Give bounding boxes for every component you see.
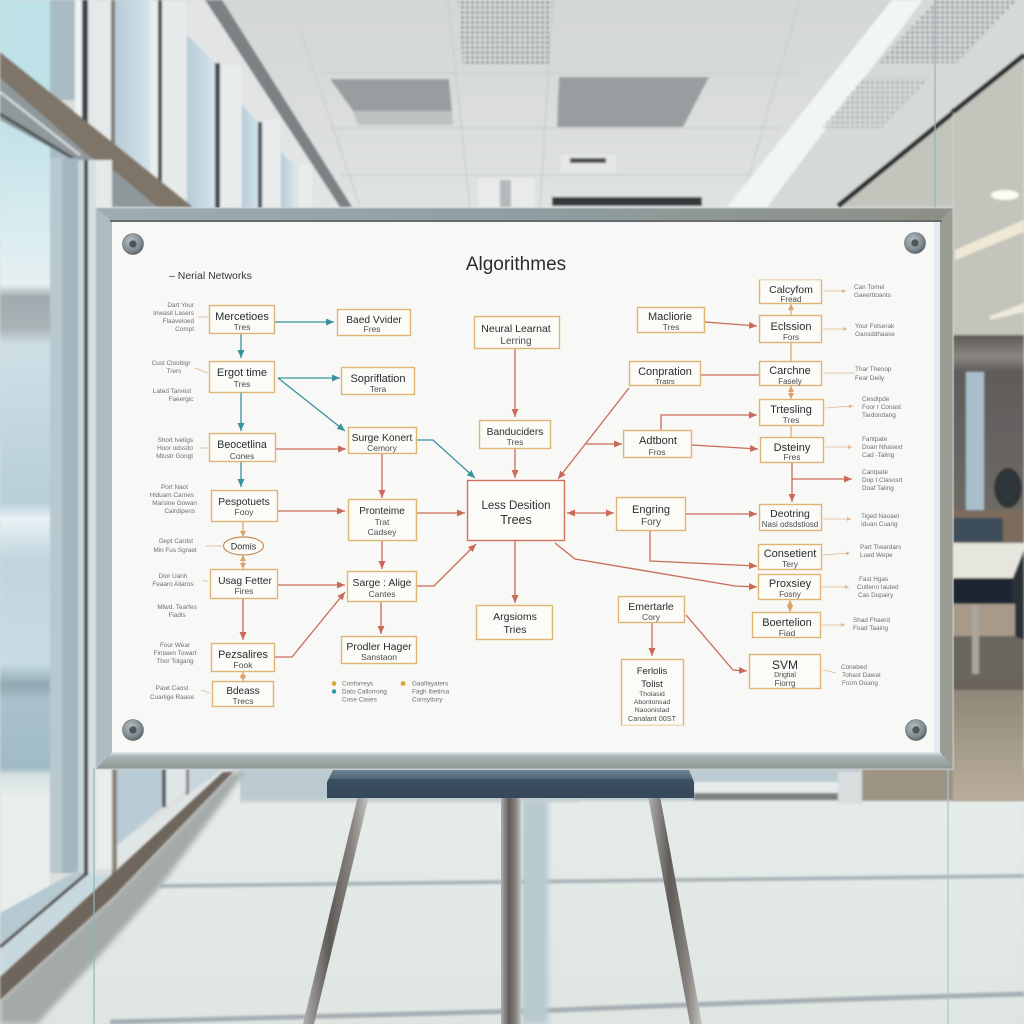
node: Sarge Alige: Sarge : Alige bbox=[353, 578, 412, 589]
node: Engring: Fory bbox=[641, 517, 661, 528]
node: Conpration: Conpration bbox=[638, 366, 692, 378]
note: Pezsalires: Four Wear bbox=[160, 642, 191, 649]
node: Consetient bbox=[758, 544, 822, 570]
note: Calcyfom: Can Tomel bbox=[854, 284, 884, 291]
node: Less Desition Trees (central) bbox=[468, 480, 564, 540]
left window wall bbox=[0, 0, 352, 1024]
legend: Cose Cases bbox=[342, 696, 377, 704]
node: Surge Konert: Surge Konert bbox=[352, 433, 412, 444]
node: Ferlolis Tolist: Canalant 00ST bbox=[628, 714, 677, 723]
node: Pezsalires: Pezsalires bbox=[218, 649, 268, 661]
node: Proxsiey bbox=[758, 574, 820, 600]
node: Baed Vvider: Baed Vvider bbox=[346, 315, 402, 326]
note: Domis bbox=[153, 538, 197, 554]
node: Surge Konert: Cemory bbox=[367, 443, 398, 453]
node: Ferlolis Tolist: Naoonistad bbox=[635, 707, 669, 714]
note: branch: Cantpate bbox=[862, 469, 888, 476]
note: Proxsiey: Fast Hgas bbox=[859, 576, 888, 583]
subtitle: neural networks: – Nerial Networks bbox=[169, 270, 252, 282]
node: Pespotuets: Fooy bbox=[235, 507, 254, 517]
node: Carchne: Carchne bbox=[769, 365, 811, 377]
node: Deotring: Nasi odsdstiosd bbox=[762, 520, 818, 529]
note: SVM bbox=[841, 664, 881, 687]
node: Ergot time bbox=[210, 362, 274, 392]
note: Usag Fetter: Dior Uanh bbox=[159, 573, 188, 580]
node: Proxsiey: Proxsiey bbox=[769, 578, 812, 590]
note: Usag Fetter lower: Mlwd. Tearfes bbox=[157, 604, 197, 611]
note: Ergot time bbox=[152, 360, 194, 403]
node: Eclssion bbox=[760, 316, 822, 342]
node: Pronteime: Trat bbox=[375, 517, 390, 527]
floor bbox=[37, 769, 1024, 1024]
note: SVM: Tohast Dawat bbox=[842, 672, 881, 679]
node: SVM: SVM bbox=[772, 658, 798, 672]
node: Surge Konert bbox=[348, 428, 416, 454]
node: Pronteime: Pronteime bbox=[359, 506, 405, 517]
node: Calcyfom: Calcyfom bbox=[769, 284, 813, 296]
note: Carchne: Fear Deily bbox=[855, 375, 885, 382]
note: Pespotuets: Port Naot bbox=[161, 484, 188, 491]
note: Bdeass: Cuarlige Raase bbox=[150, 694, 194, 701]
node: Calcyfom: Fread bbox=[781, 295, 801, 304]
node: Argsioms Trees: Tries bbox=[504, 624, 526, 636]
note: Calcyfom bbox=[854, 284, 891, 299]
node: Emertarle bbox=[618, 596, 684, 622]
background room on the right bbox=[953, 0, 1024, 800]
note: Pezsalires bbox=[154, 642, 197, 665]
note: Dsteiny: Cad -Taling bbox=[862, 452, 895, 459]
diagram content bbox=[150, 280, 903, 726]
node: Pespotuets bbox=[212, 490, 278, 522]
node: Proxsiey: Fosny bbox=[779, 590, 801, 599]
node: Prodler Hager: Sanstaon bbox=[361, 652, 397, 662]
node: Beocetlina bbox=[210, 434, 276, 462]
note: Ergot time: Lated Tarvest bbox=[153, 388, 191, 395]
node: Pespotuets: Pespotuets bbox=[218, 497, 270, 508]
node: Baed Vvider bbox=[338, 310, 410, 336]
pole shadow on floor bbox=[522, 800, 548, 1024]
note: Dsteiny: Doan Nhasext bbox=[862, 444, 903, 451]
node: Neural Learnat bbox=[474, 316, 560, 348]
orange connectors bbox=[243, 304, 791, 681]
node: Conpration: Tratrs bbox=[655, 377, 675, 386]
note: Mercetioes: Compt bbox=[175, 326, 194, 333]
node: Macliorie: Tres bbox=[663, 322, 679, 332]
node: Pronteime: Cadsey bbox=[368, 527, 397, 537]
legend: Gaalfayaters bbox=[412, 680, 448, 688]
node: Ferlolis Tolist: Tholasid bbox=[639, 691, 665, 698]
note: Consetient: Lued Wepe bbox=[860, 552, 893, 559]
node: Mercetioes: Mercetioes bbox=[215, 311, 269, 323]
node: Usag Fetter: Fires bbox=[235, 586, 253, 596]
note: Beocetlina: Short Ivetigs bbox=[157, 437, 193, 444]
note: Consetient bbox=[860, 544, 901, 559]
note: Usag Fetter lower bbox=[157, 604, 197, 619]
note: Beocetlina: Mtustr Gongt bbox=[156, 453, 193, 460]
node: Emertarle: Cory bbox=[642, 612, 661, 622]
note: Deotring: Tiged Naoaet bbox=[861, 513, 899, 520]
node: Dsteiny: Fres bbox=[784, 452, 800, 462]
note: Carchne bbox=[855, 366, 892, 382]
note: Ergot time: Trers bbox=[167, 368, 181, 375]
node: Adtbont: Fros bbox=[648, 447, 666, 457]
note: Dsteiny bbox=[862, 436, 903, 459]
node: Deotring: Deotring bbox=[770, 508, 810, 520]
title: Algorithmes bbox=[466, 254, 566, 275]
note: Pespotuets: Marsine Gowan bbox=[152, 500, 197, 507]
upper right ceiling grille bbox=[878, 0, 1017, 63]
note: branch: Dop t Clasosrt bbox=[862, 477, 903, 484]
node: Conpration bbox=[630, 362, 700, 386]
legend: Dato Callorrong bbox=[342, 688, 387, 696]
note: Mercetioes bbox=[153, 302, 195, 333]
note: Usag Fetter lower: Fiadls bbox=[168, 612, 186, 619]
note: Proxsiey bbox=[857, 576, 899, 599]
node: Boertelion: Boertelion bbox=[762, 617, 812, 629]
node: SVM bbox=[750, 654, 820, 688]
teal connectors bbox=[241, 322, 475, 487]
node: Boertelion bbox=[752, 612, 820, 638]
note: Usag Fetter: Feaaro Aliaros bbox=[152, 581, 194, 588]
node: Trtesling: Trtesling bbox=[770, 404, 812, 416]
node: Eclssion: Eclssion bbox=[771, 321, 811, 333]
node: Calcyfom bbox=[760, 280, 822, 304]
note: Deotring bbox=[861, 513, 899, 528]
easel stand bbox=[303, 770, 702, 1024]
note: Ergot time: Cust Cloobigr bbox=[152, 360, 191, 367]
node: Pronteime bbox=[348, 500, 416, 540]
right annotations bbox=[841, 284, 903, 687]
node: Less Desition Trees (central): Trees bbox=[500, 513, 532, 527]
note: Pezsalires: Fintawn Towart bbox=[154, 650, 197, 657]
node: Domis oval bbox=[224, 537, 264, 555]
node: Consetient: Tery bbox=[782, 559, 799, 569]
note: Proxsiey: Cutlenn Iauted bbox=[857, 584, 899, 591]
note: Mercetioes: Flaaveloed bbox=[163, 318, 194, 325]
upper-left mullion bbox=[50, 140, 88, 210]
node: Mercetioes bbox=[210, 306, 274, 334]
node: Usag Fetter: Usag Fetter bbox=[218, 576, 272, 587]
node: SVM: Fiorrg bbox=[775, 679, 795, 688]
node: Ferlolis Tolist: Abontonsad bbox=[634, 699, 670, 706]
node: Sarge Alige bbox=[348, 572, 416, 602]
right ceiling beam with grilles bbox=[727, 0, 1024, 207]
node: Ferlolis Tolist: Ferlolis bbox=[637, 666, 668, 677]
node: Argsioms Trees bbox=[476, 606, 552, 640]
easel shelf bbox=[327, 770, 694, 798]
node: Banduciders: Banduciders bbox=[487, 427, 543, 438]
note: Pezsalires: Thor Tolgang bbox=[156, 658, 194, 665]
board frame bbox=[96, 208, 953, 769]
node: Neural Learnat: Neural Learnat bbox=[481, 323, 551, 335]
node: Adtbont: Adtbont bbox=[639, 435, 677, 447]
node: Prodler Hager bbox=[342, 636, 416, 664]
note: Eclssion bbox=[855, 323, 895, 338]
note: Trtesling: Cesdtpde bbox=[862, 396, 890, 403]
whiteboard panel: algorithm diagram bbox=[112, 222, 940, 752]
note: Usag Fetter bbox=[152, 573, 194, 588]
note: Pespotuets: Cairdipens bbox=[164, 508, 195, 515]
node: Less Desition Trees (central): Less Desition bbox=[481, 500, 551, 512]
window sill and shadow bbox=[0, 772, 245, 1024]
node: Bdeass: Bdeass bbox=[226, 686, 260, 697]
left annotations bbox=[150, 302, 197, 701]
node: Eclssion: Fors bbox=[783, 333, 799, 342]
node: Usag Fetter bbox=[210, 570, 278, 598]
legend: Fagh Ibetirsa bbox=[412, 688, 450, 696]
note: Proxsiey: Cas Dupairy bbox=[858, 592, 894, 599]
note: SVM: Conebed bbox=[841, 664, 867, 671]
node: Neural Learnat: Lerring bbox=[500, 336, 532, 347]
legend: Consyttory bbox=[412, 696, 443, 704]
note: Bdeass: Pawt Caost bbox=[156, 685, 189, 692]
screws bbox=[122, 232, 926, 740]
note: Boertelion: Foad Taaing bbox=[853, 625, 889, 632]
node: Banduciders: Tres bbox=[507, 437, 523, 447]
note: Deotring: Iduan Cuang bbox=[861, 521, 898, 528]
node: Deotring bbox=[760, 504, 822, 530]
note: Pespotuets: Hiduam Carnes bbox=[150, 492, 194, 499]
note: Boertelion bbox=[853, 617, 890, 632]
node: Prodler Hager: Prodler Hager bbox=[346, 641, 412, 653]
node: SVM: Drigtial bbox=[774, 672, 796, 679]
node: Pezsalires bbox=[212, 644, 274, 672]
node: Consetient: Consetient bbox=[764, 548, 816, 560]
node: Beocetlina: Beocetlina bbox=[217, 439, 267, 451]
node: Dsteiny: Dsteiny bbox=[774, 442, 811, 454]
note: Eclssion: Oansddhaase bbox=[855, 331, 895, 338]
legend bbox=[332, 680, 450, 704]
node: Trtesling: Tres bbox=[783, 415, 799, 425]
node: Sopriflation bbox=[342, 368, 414, 394]
node: Domis oval: Domis bbox=[231, 542, 257, 552]
node: Pezsalires: Fook bbox=[234, 660, 253, 670]
note: Trtesling: Tardondang bbox=[862, 412, 896, 419]
node: Sopriflation: Sopriflation bbox=[350, 373, 406, 385]
note: Trtesling bbox=[862, 396, 901, 419]
node: Sopriflation: Tera bbox=[370, 384, 387, 394]
note: Trtesling: Foor r Conast bbox=[862, 404, 901, 411]
note: Bdeass bbox=[150, 685, 194, 701]
note: Mercetioes: Inwasit Lasers bbox=[153, 310, 194, 317]
node: Macliorie bbox=[638, 308, 704, 332]
node: Carchne: Fasely bbox=[778, 377, 802, 386]
red connectors bbox=[243, 322, 852, 671]
node: Banduciders bbox=[480, 420, 550, 448]
node: Bdeass: Trecs bbox=[233, 696, 253, 706]
legend: Conforreys bbox=[342, 680, 373, 688]
note: Boertelion: Shad Fhaerd bbox=[853, 617, 890, 624]
node: Ergot time: Ergot time bbox=[217, 367, 267, 379]
node: Ferlolis Tolist: Tolist bbox=[641, 679, 663, 690]
note: Beocetlina: Hoor odssito bbox=[157, 445, 193, 452]
node: Dsteiny bbox=[760, 438, 824, 462]
note: Beocetlina bbox=[156, 437, 193, 460]
note: Pespotuets bbox=[150, 484, 197, 515]
annotation leader lines bbox=[195, 291, 855, 693]
node: Macliorie: Macliorie bbox=[648, 311, 692, 323]
note: SVM: From Ooang bbox=[842, 680, 878, 687]
note: Calcyfom: Gaeerttoants bbox=[854, 292, 891, 299]
node: Beocetlina: Cones bbox=[230, 451, 254, 461]
note: Domis: Min Fus Sgraet bbox=[153, 547, 197, 554]
node: Mercetioes: Tres bbox=[234, 322, 250, 332]
node: Carchne bbox=[760, 362, 822, 386]
node: Argsioms Trees: Argsioms bbox=[493, 611, 537, 623]
note: Dsteiny: Fantpate bbox=[862, 436, 888, 443]
node: Adtbont bbox=[624, 430, 692, 458]
note: Mercetioes: Dart Your bbox=[167, 302, 195, 309]
node: Sarge Alige: Cantes bbox=[369, 589, 395, 599]
node: Engring bbox=[616, 498, 686, 530]
note: branch: Doaf Taling bbox=[862, 485, 894, 492]
node: Bdeass bbox=[212, 682, 274, 706]
ceiling bbox=[0, 0, 1024, 210]
note: branch bbox=[862, 469, 903, 492]
note: Domis: Dept Cardst bbox=[159, 538, 193, 545]
note: Ergot time: Faeergic bbox=[169, 396, 194, 403]
node: Emertarle: Emertarle bbox=[628, 601, 674, 613]
note: Eclssion: Your Folserak bbox=[855, 323, 895, 330]
node: Ergot time: Tres bbox=[234, 379, 250, 389]
note: Carchne: Thar Thenop bbox=[855, 366, 892, 373]
node: Ferlolis Tolist bbox=[622, 660, 684, 726]
note: Consetient: Part Tiwardars bbox=[860, 544, 901, 551]
easel legs bbox=[303, 796, 702, 1024]
node: Engring: Engring bbox=[632, 504, 670, 516]
node: Baed Vvider: Fres bbox=[364, 324, 380, 334]
node: Trtesling bbox=[760, 400, 824, 426]
node: Boertelion: Fiad bbox=[779, 628, 796, 638]
